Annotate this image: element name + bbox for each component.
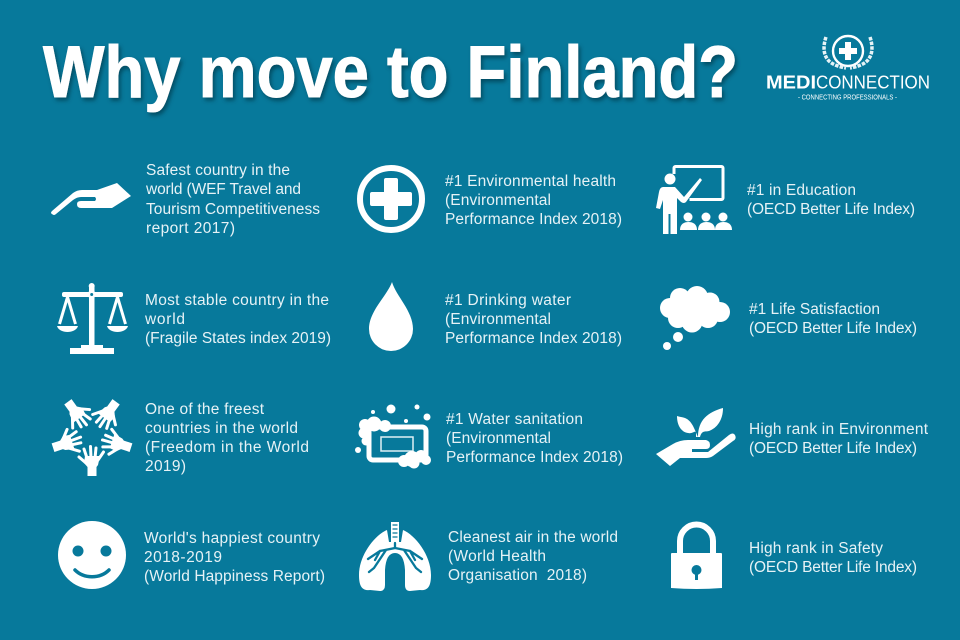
text: life satisfaction: (OECD Better Life Index) — [749, 320, 917, 337]
title: Why move to Finland? — [43, 32, 738, 113]
icon: thought cloud — [660, 286, 730, 350]
icon: soap bar and bubbles — [355, 404, 431, 468]
text: safety: (OECD Better Life Index) — [749, 559, 917, 576]
text: water sanitation: Performance Index 2018) — [446, 449, 623, 466]
text: cleanest air — [448, 529, 618, 584]
text: safest country — [145, 162, 320, 237]
icon: teacher at board — [656, 166, 732, 234]
text: happiest country: 2018-2019 — [144, 549, 222, 566]
text: environment — [749, 421, 929, 457]
icon: five hands — [49, 394, 135, 476]
text: water sanitation — [446, 411, 623, 466]
text: drinking water: (Environmental — [445, 311, 551, 328]
text: education: #1 in Education — [747, 182, 856, 199]
text: freest countries: One of the freest — [145, 401, 265, 418]
text: freest countries — [145, 401, 309, 475]
text: cleanest air: Cleanest air in the world — [448, 529, 618, 546]
text: safest country: Safest country in the — [146, 162, 290, 179]
text: life satisfaction: #1 Life Satisfaction — [749, 301, 880, 318]
text: environment: (OECD Better Life Index) — [749, 440, 917, 457]
text: happiest country: (World Happiness Report) — [144, 568, 325, 585]
text: freest countries: 2019) — [145, 458, 186, 475]
icon: water drop — [369, 282, 413, 351]
logo tagline: - CONNECTING PROFESSIONALS - — [798, 94, 898, 102]
logo wordmark: MEDI — [766, 72, 816, 92]
text: drinking water — [445, 292, 622, 347]
text: education: (OECD Better Life Index) — [747, 201, 915, 218]
text: cleanest air: (World Health — [448, 548, 546, 565]
text: freest countries: (Freedom in the World — [145, 439, 309, 456]
text: safest country: Tourism Competitiveness — [146, 201, 320, 218]
logo wordmark: CONNECTION — [816, 72, 930, 92]
logo wordmark — [766, 72, 930, 92]
text: happiest country — [144, 530, 325, 585]
text: environmental health: (Environmental — [445, 192, 551, 209]
text: environmental health — [445, 173, 622, 228]
text: water sanitation: #1 Water sanitation — [446, 411, 583, 428]
text: most stable: world — [144, 311, 185, 328]
text: most stable — [144, 292, 331, 347]
text: safest country: world (WEF Travel and — [145, 181, 301, 198]
text: environment: High rank in Environment — [749, 421, 929, 438]
icon: padlock — [671, 524, 722, 589]
text: education — [747, 182, 915, 218]
icon: plant in hand — [656, 408, 736, 466]
icon: protecting hand — [51, 183, 131, 215]
text: safety: High rank in Safety — [749, 540, 883, 557]
icon: smiley face — [58, 521, 126, 589]
logo emblem — [824, 36, 872, 68]
text: most stable: Most stable country in the — [145, 292, 329, 309]
text: happiest country: World's happiest country — [144, 530, 320, 547]
text: environmental health: Performance Index 2018) — [445, 211, 622, 228]
icon: scales — [57, 283, 128, 354]
text: drinking water: #1 Drinking water — [445, 292, 571, 309]
logo: MediConnection — [766, 36, 930, 102]
text: freest countries: countries in the world — [145, 420, 298, 437]
text: water sanitation: (Environmental — [446, 430, 551, 447]
text: safety — [749, 540, 917, 576]
text: most stable: (Fragile States index 2019) — [145, 330, 331, 347]
icon: medical cross — [360, 168, 422, 230]
text: environmental health: #1 Environmental health — [445, 173, 616, 190]
icon: lungs — [359, 522, 431, 591]
text: drinking water: Performance Index 2018) — [445, 330, 622, 347]
text: cleanest air: Organisation 2018) — [448, 567, 587, 584]
text: safest country: report 2017) — [146, 220, 235, 237]
text: life satisfaction — [749, 301, 917, 337]
